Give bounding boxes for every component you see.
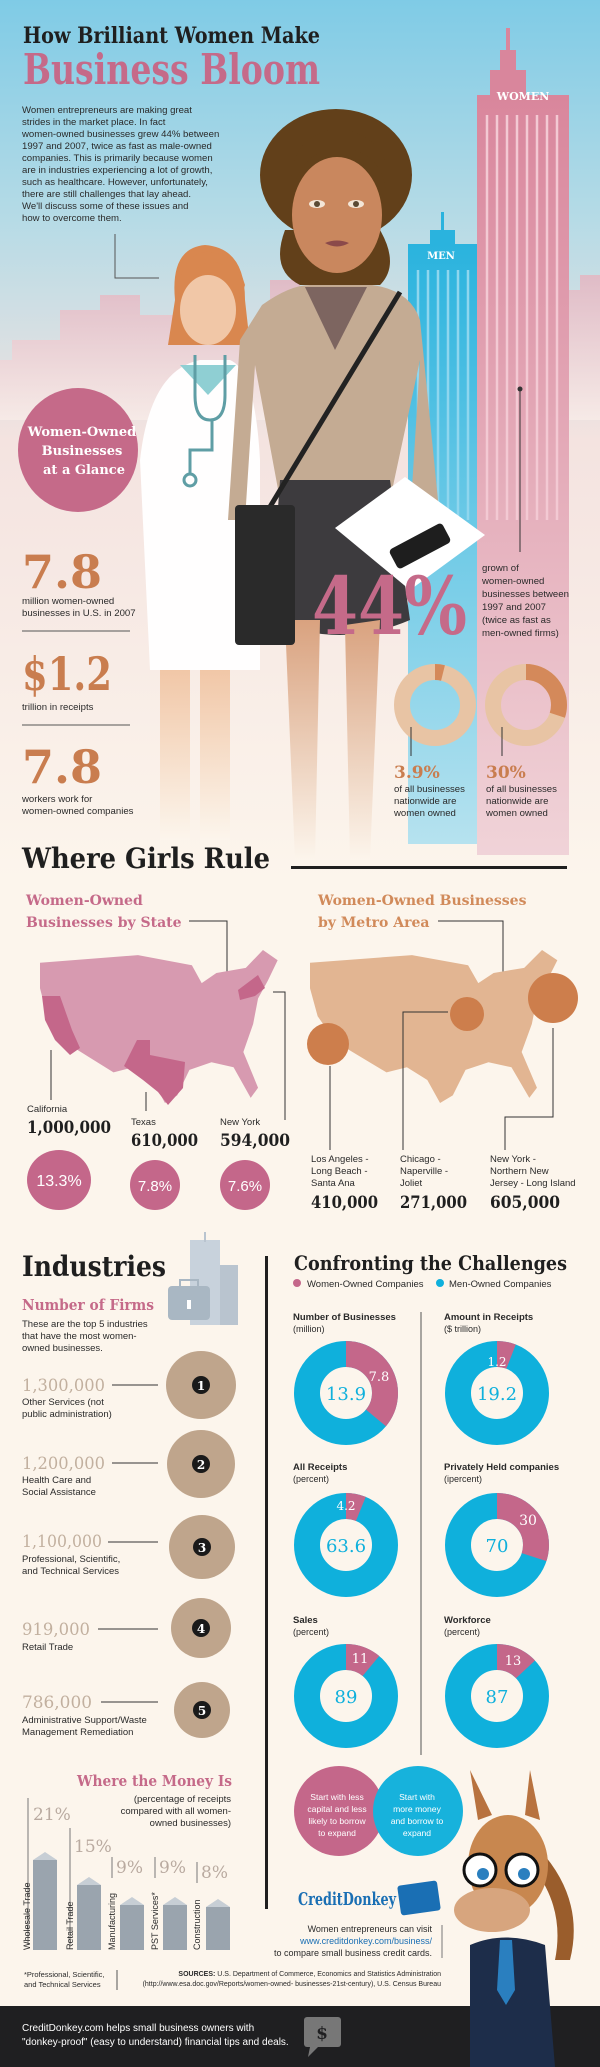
state stat: Texas: 610,000 bbox=[131, 1131, 198, 1151]
industry 1: 1 bbox=[197, 1379, 205, 1393]
intro text: strides in the market place. In fact bbox=[22, 117, 166, 128]
icon: buildings and briefcase bbox=[168, 1232, 238, 1325]
bar chart: money stacks: 8% bbox=[201, 1863, 228, 1883]
donut: 3.9%: nationwide are bbox=[394, 796, 456, 807]
metro stat: New York: 605,000 bbox=[490, 1193, 560, 1213]
illustration: nurse bbox=[140, 245, 260, 840]
stat: 7.8 workers: 7.8 bbox=[22, 740, 102, 794]
industry 1: 1,300,000 bbox=[22, 1376, 105, 1396]
bar chart: money stacks: 21% bbox=[33, 1805, 71, 1825]
comparison circles: Start with less bbox=[310, 1792, 364, 1802]
donut: 3.9%: of all businesses bbox=[394, 784, 465, 795]
heading: Confronting the Challenges: Confronting the Challenges bbox=[294, 1251, 567, 1275]
callout: women-owned businesses at a glance: Women-Owned bbox=[27, 425, 136, 440]
donut: amount in receipts: ($ trillion) bbox=[444, 1324, 481, 1334]
metro stat: Los Angeles: Santa Ana bbox=[311, 1178, 356, 1189]
donut: amount in receipts bbox=[444, 1312, 536, 1432]
heading: Confronting the Challenges: Men-Owned Companies bbox=[449, 1279, 552, 1290]
stat: 44% growth: 1997 and 2007 bbox=[482, 602, 546, 613]
callout: women-owned businesses at a glance bbox=[18, 388, 138, 512]
heading: Where the Money Is: compared with all women- bbox=[121, 1806, 231, 1817]
industry 3: 1,100,000 bbox=[22, 1532, 102, 1552]
metro stat: Chicago bbox=[400, 1012, 467, 1213]
subheading: by state: Businesses by State bbox=[26, 915, 182, 931]
industry 3: 3 bbox=[198, 1541, 206, 1555]
donut: workforce: 87 bbox=[486, 1687, 508, 1708]
metro stat: Chicago: 271,000 bbox=[400, 1193, 467, 1213]
heading: Confronting the Challenges bbox=[293, 1251, 567, 1290]
intro text: there are still challenges that lay ahead. bbox=[22, 189, 191, 200]
heading: Confronting the Challenges: Women-Owned Companies bbox=[307, 1279, 424, 1290]
building: men tower bbox=[408, 212, 477, 844]
intro text: how to overcome them. bbox=[22, 213, 122, 224]
intro text: women-owned businesses grew 44% between bbox=[21, 129, 219, 140]
donut: number of businesses bbox=[293, 1312, 396, 1432]
donut: workforce: (percent) bbox=[444, 1627, 480, 1637]
heading: Where the Money Is: owned businesses) bbox=[150, 1818, 231, 1829]
industry 2 bbox=[22, 1430, 235, 1498]
callout: women-owned businesses at a glance: Businesses bbox=[42, 444, 122, 459]
subheading: number of firms: that have the most women- bbox=[22, 1331, 137, 1342]
donut: 30%: 30% bbox=[486, 763, 526, 783]
state stat: New York bbox=[220, 992, 290, 1210]
logo: CreditDonkey: CreditDonkey bbox=[298, 1889, 396, 1910]
stat: $1.2 trillion: trillion in receipts bbox=[22, 702, 94, 713]
metro stat: New York: New York - bbox=[490, 1154, 536, 1165]
donut: amount in receipts: Amount in Receipts bbox=[444, 1312, 533, 1323]
subheading: number of firms: owned businesses. bbox=[22, 1343, 103, 1354]
industry 5 bbox=[22, 1682, 230, 1738]
donut: workforce: 13 bbox=[505, 1654, 521, 1669]
industry 5: 786,000 bbox=[22, 1693, 92, 1713]
bar chart: money stacks: 9% bbox=[159, 1858, 186, 1878]
metro stat: Chicago: Joliet bbox=[400, 1178, 423, 1189]
footer band bbox=[0, 2006, 600, 2067]
donut: privately held: 70 bbox=[486, 1536, 508, 1557]
state stat: California bbox=[27, 1050, 111, 1210]
footnote: and Technical Services bbox=[24, 1980, 101, 1989]
metro stat: Los Angeles: 410,000 bbox=[311, 1193, 378, 1213]
donut: sales: Sales bbox=[293, 1615, 318, 1626]
bar chart: money stacks: 15% bbox=[74, 1837, 112, 1857]
industry 2: Health Care and bbox=[22, 1475, 91, 1486]
donut: 30% bbox=[485, 672, 559, 819]
donut: workforce bbox=[444, 1615, 536, 1735]
donut: 30%: of all businesses bbox=[486, 784, 557, 795]
state stat: California: 13.3% bbox=[36, 1173, 82, 1190]
stat: 7.8 million bbox=[22, 545, 136, 619]
stat: 7.8 million: businesses in U.S. in 2007 bbox=[22, 608, 136, 619]
intro text: such as healthcare. However, unfortunately, bbox=[22, 177, 208, 188]
donut: all receipts: All Receipts bbox=[293, 1462, 347, 1473]
subheading: by metro area: Women-Owned Businesses bbox=[317, 893, 527, 909]
donut: all receipts: 63.6 bbox=[326, 1536, 366, 1557]
state stat: Texas: 7.8% bbox=[138, 1178, 172, 1195]
donut: privately held bbox=[444, 1462, 559, 1584]
illustration: businesswoman bbox=[228, 109, 485, 860]
logo: CreditDonkey bbox=[298, 1880, 441, 1916]
intro text: are in industries experiencing a lot of growth, bbox=[22, 165, 212, 176]
callout: women-owned businesses at a glance: at a Glance bbox=[43, 463, 125, 478]
comparison circles bbox=[294, 1766, 463, 1856]
footer band: $ bbox=[316, 2024, 328, 2044]
metro stat: Los Angeles: Los Angeles - bbox=[311, 1154, 369, 1165]
bar chart: money stacks: PST Services* bbox=[150, 1892, 160, 1950]
comparison circles: more money bbox=[393, 1804, 442, 1814]
call to action text: www.creditdonkey.com/business/ bbox=[299, 1936, 432, 1946]
donut: 3.9%: 3.9% bbox=[394, 763, 440, 783]
sources: (http://www.esa.doc.gov/Reports/women-owned- businesses-21st-century), U.S. Census Bureau bbox=[143, 1981, 441, 1988]
stat: 7.8 workers: women-owned companies bbox=[21, 806, 134, 817]
state stat: Texas: Texas bbox=[131, 1117, 156, 1128]
industry 2: 1,200,000 bbox=[22, 1454, 105, 1474]
intro text: companies. This is primarily because women bbox=[22, 153, 213, 164]
donut: privately held: 30 bbox=[519, 1513, 537, 1529]
donut: sales: 89 bbox=[335, 1687, 357, 1708]
stat: 44% growth: 44% bbox=[312, 559, 467, 653]
subheading: number of firms: Number of Firms bbox=[22, 1296, 154, 1314]
call to action text bbox=[274, 1924, 442, 1958]
subheading: number of firms: These are the top 5 industries bbox=[22, 1319, 148, 1330]
call to action text: Women entrepreneurs can visit bbox=[308, 1924, 432, 1934]
state stat: Texas bbox=[130, 1092, 198, 1210]
footer band: "donkey-proof" (easy to understand) financial tips and deals. bbox=[22, 2037, 289, 2048]
stat: 44% growth: grown of bbox=[482, 563, 519, 574]
heading: Where the Money Is: (percentage of receipts bbox=[134, 1794, 231, 1805]
stat: 7.8 million: 7.8 bbox=[22, 545, 102, 599]
heading: Where Girls Rule: Where Girls Rule bbox=[21, 842, 270, 875]
industry 4 bbox=[22, 1598, 231, 1658]
bar chart: money stacks: Construction bbox=[192, 1899, 202, 1950]
donut: sales bbox=[293, 1615, 385, 1735]
state stat: New York: 7.6% bbox=[228, 1178, 262, 1195]
bar chart: money stacks bbox=[22, 1798, 230, 1950]
industry 5: Administrative Support/Waste bbox=[22, 1715, 147, 1726]
industry 2: Social Assistance bbox=[22, 1487, 96, 1498]
title bbox=[23, 23, 320, 94]
stat: 44% growth: (twice as fast as bbox=[482, 615, 551, 626]
bar chart: money stacks: Manufacturing bbox=[107, 1893, 117, 1950]
comparison circles: to expand bbox=[318, 1828, 356, 1838]
industry 5: Management Remediation bbox=[22, 1727, 133, 1738]
mascot: donkey bbox=[454, 1770, 574, 2067]
title: Business Bloom bbox=[23, 45, 320, 94]
state stat: New York: New York bbox=[220, 1117, 260, 1128]
stat: 44% growth bbox=[312, 386, 569, 653]
donut: 30%: women owned bbox=[485, 808, 548, 819]
industry 3: and Technical Services bbox=[22, 1566, 119, 1577]
divider vertical bbox=[265, 1256, 268, 1909]
donut: amount in receipts: 1.2 bbox=[487, 1355, 507, 1369]
donut: all receipts: 4.2 bbox=[336, 1499, 356, 1513]
industry 4: 919,000 bbox=[22, 1620, 90, 1640]
intro text: 1997 and 2007, twice as fast as male-owned bbox=[22, 141, 212, 152]
intro text: We'll discuss some of these issues and bbox=[22, 201, 188, 212]
donut: number of businesses: 13.9 bbox=[326, 1384, 366, 1405]
donut: all receipts bbox=[293, 1462, 385, 1584]
comparison circles: Start with bbox=[399, 1792, 435, 1802]
subheading: by metro area bbox=[317, 893, 527, 982]
footer band: CreditDonkey.com helps small business owners with bbox=[22, 2023, 254, 2034]
donut: number of businesses: Number of Businesses bbox=[293, 1312, 396, 1323]
industry 3 bbox=[22, 1515, 235, 1579]
industry 3: Professional, Scientific, bbox=[22, 1554, 120, 1565]
donut: workforce: Workforce bbox=[444, 1615, 491, 1626]
industry 4: 4 bbox=[197, 1622, 205, 1636]
map: states bbox=[40, 950, 278, 1105]
sources: SOURCES: U.S. Department of Commerce, Economics and Statistics Administration bbox=[178, 1971, 441, 1978]
stat: $1.2 trillion bbox=[22, 647, 112, 713]
stat: 7.8 million: million women-owned bbox=[22, 596, 114, 607]
metro stat: Chicago: Chicago - bbox=[400, 1154, 441, 1165]
bar chart: money stacks: Wholesale Trade bbox=[22, 1882, 32, 1950]
donut: 3.9%: women owned bbox=[393, 808, 456, 819]
subheading: by state bbox=[25, 893, 230, 982]
donut: number of businesses: (million) bbox=[293, 1324, 325, 1334]
building: women tower: WOMEN bbox=[496, 90, 549, 103]
industry 1: Other Services (not bbox=[22, 1397, 104, 1408]
stat: 7.8 workers: workers work for bbox=[21, 794, 93, 805]
bar chart: money stacks: 9% bbox=[116, 1858, 143, 1878]
metro stat: Chicago: Naperville - bbox=[400, 1166, 448, 1177]
stat: 44% growth: businesses between bbox=[482, 589, 569, 600]
background sky bbox=[0, 0, 600, 880]
title: How Brilliant Women Make bbox=[23, 23, 320, 49]
stat: 44% growth: women-owned bbox=[481, 576, 544, 587]
donut: all receipts: (percent) bbox=[293, 1474, 329, 1484]
industry 2: 2 bbox=[197, 1458, 205, 1472]
donut: 3.9% bbox=[393, 672, 468, 819]
donut: privately held: Privately Held companies bbox=[444, 1462, 559, 1473]
state stat: California: California bbox=[27, 1104, 68, 1115]
heading: Where the Money Is: Where the Money Is bbox=[76, 1772, 232, 1790]
stat: 7.8 workers bbox=[21, 740, 134, 817]
stat: 44% growth: men-owned firms) bbox=[482, 628, 559, 639]
metro stat: Los Angeles: Long Beach - bbox=[311, 1166, 368, 1177]
subheading: number of firms bbox=[22, 1296, 154, 1354]
donut: sales: 11 bbox=[352, 1652, 368, 1667]
comparison circles: capital and less bbox=[307, 1804, 367, 1814]
building: women tower bbox=[477, 28, 569, 855]
metro stat: Los Angeles bbox=[311, 1066, 378, 1213]
map: metro bbox=[307, 950, 578, 1103]
donut: amount in receipts: 19.2 bbox=[477, 1384, 517, 1405]
donut: sales: (percent) bbox=[293, 1627, 329, 1637]
state stat: New York: 594,000 bbox=[220, 1131, 290, 1151]
donut: number of businesses: 7.8 bbox=[369, 1370, 389, 1385]
industry 1 bbox=[22, 1351, 236, 1420]
industry 5: 5 bbox=[198, 1704, 206, 1718]
subheading: by state: Women-Owned bbox=[25, 893, 143, 909]
industry 4: Retail Trade bbox=[22, 1642, 73, 1653]
metro stat: New York: Northern New bbox=[490, 1166, 549, 1177]
comparison circles: and borrow to bbox=[391, 1816, 443, 1826]
metro stat: New York: Jersey - Long Island bbox=[490, 1178, 576, 1189]
metro stat: New York bbox=[490, 1028, 576, 1213]
state stat: California: 1,000,000 bbox=[27, 1118, 111, 1138]
donut: privately held: (ipercent) bbox=[444, 1474, 482, 1484]
heading: Industries: Industries bbox=[22, 1250, 166, 1283]
building: men tower: MEN bbox=[427, 251, 455, 262]
intro text bbox=[21, 105, 219, 278]
heading: Where Girls Rule bbox=[21, 842, 567, 875]
comparison circles: likely to borrow bbox=[308, 1816, 366, 1826]
stat: $1.2 trillion: $1.2 bbox=[22, 647, 112, 701]
call to action text: to compare small business credit cards. bbox=[274, 1948, 432, 1958]
comparison circles: expand bbox=[403, 1828, 431, 1838]
bar chart: money stacks: Retail Trade bbox=[65, 1901, 75, 1950]
industry 1: public administration) bbox=[22, 1409, 112, 1420]
intro text: Women entrepreneurs are making great bbox=[22, 105, 192, 116]
footnote: *Professional, Scientific, bbox=[24, 1970, 104, 1979]
subheading: by metro area: by Metro Area bbox=[318, 915, 429, 931]
skyline bbox=[0, 275, 600, 420]
heading: Where the Money Is bbox=[76, 1772, 232, 1829]
donut: 30%: nationwide are bbox=[486, 796, 548, 807]
